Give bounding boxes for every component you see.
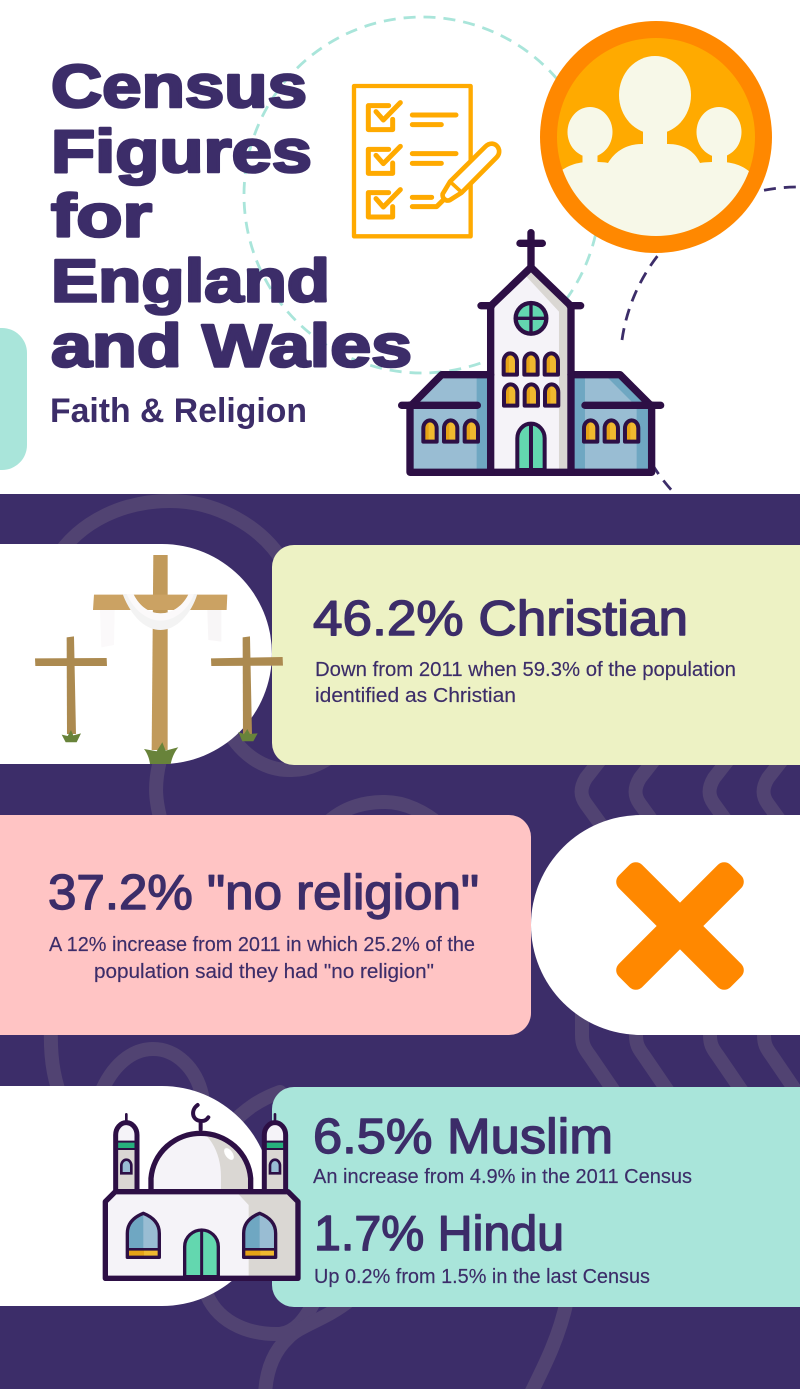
title (51, 53, 412, 380)
stat: christian: 46.2% Christian (313, 592, 688, 646)
icon: orange cross (568, 814, 792, 1038)
panel: christian image (0, 544, 272, 764)
panel: faiths image (0, 1086, 272, 1306)
hindu description: Up 0.2% from 1.5% in the last Census (314, 1266, 650, 1288)
christian description: identified as Christian (315, 685, 516, 707)
icon: people badge (540, 21, 772, 253)
no religion description: A 12% increase from 2011 in which 25.2% of the (49, 934, 475, 956)
stat: hindu: 1.7% Hindu (314, 1207, 564, 1261)
christian description (315, 659, 736, 707)
teal dashed circle (244, 17, 600, 373)
panel: no religion image (531, 815, 800, 1035)
muslim description: An increase from 4.9% in the 2011 Census (313, 1166, 692, 1188)
panel: christian text (272, 545, 800, 765)
navy dashed arcs (622, 187, 800, 496)
decorative teal tab (0, 328, 27, 470)
no religion description: population said they had "no religion" (94, 961, 434, 983)
panel: faiths text (272, 1087, 800, 1307)
panel: purple background (0, 494, 800, 1389)
title: England (51, 248, 330, 314)
title: Figures (51, 118, 312, 185)
background swirls (51, 501, 800, 1389)
title: Census (51, 53, 307, 120)
title: and Wales (51, 312, 412, 380)
icon: checklist (354, 86, 499, 236)
stat: no religion: 37.2% "no religion" (48, 866, 479, 920)
no religion description (49, 934, 475, 983)
icon: mosque (105, 1105, 298, 1278)
panel: no religion text (0, 815, 531, 1035)
panel: header background (0, 0, 800, 494)
subtitle: Faith & Religion (50, 392, 307, 430)
stat: muslim: 6.5% Muslim (313, 1110, 613, 1164)
icon: three crosses (35, 555, 283, 764)
title: for (51, 182, 152, 250)
icon: church (402, 233, 661, 472)
christian description: Down from 2011 when 59.3% of the population (315, 659, 736, 681)
